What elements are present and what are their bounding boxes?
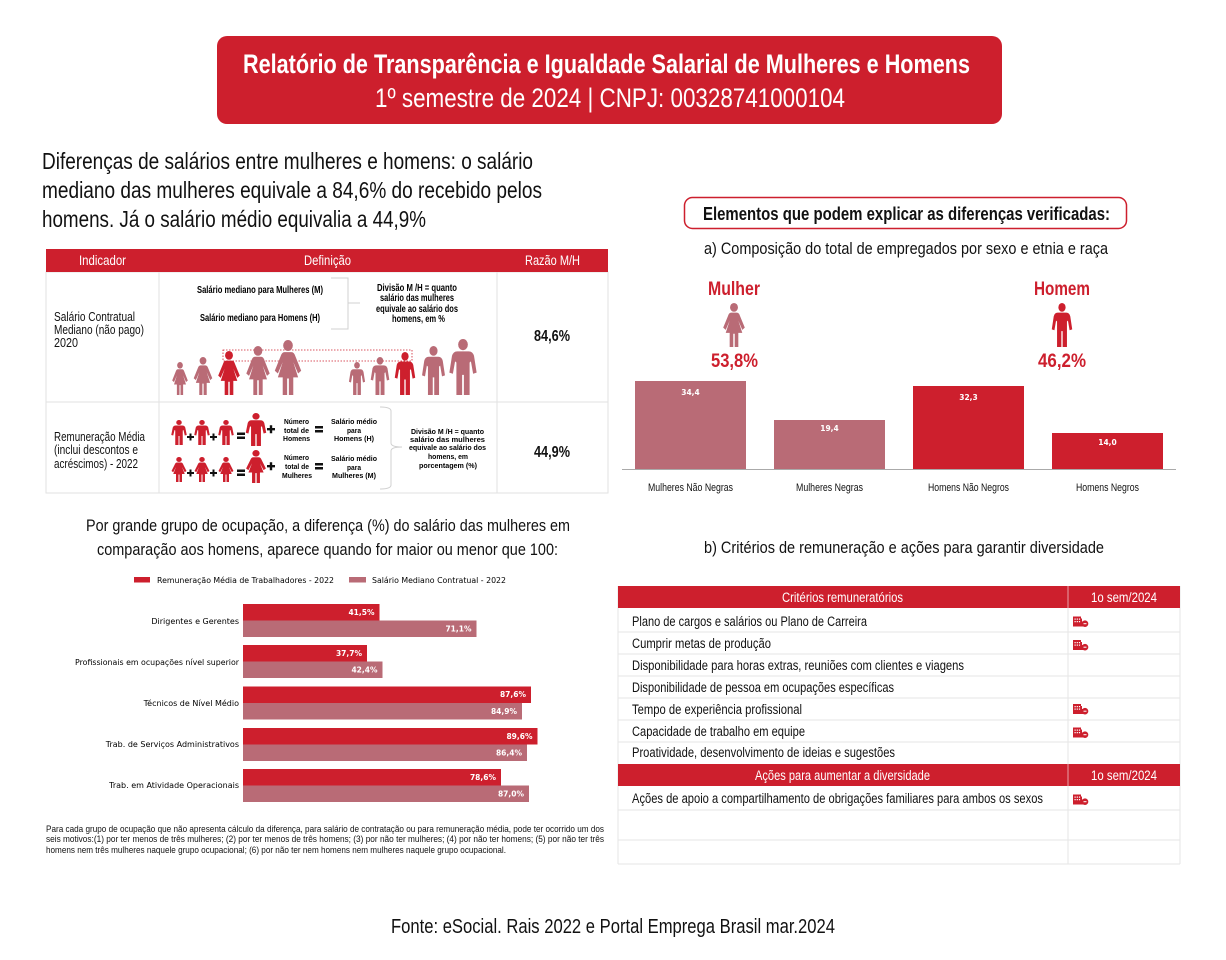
diversity row: Ações de apoio a compartilhamento de obrigações familiares para ambos os sexos — [632, 791, 1043, 806]
definition: average pay text: Divisão M /H = quanto — [411, 427, 484, 436]
bars: Serviços Administrativos: 89,6% — [506, 732, 533, 741]
table header: Indicador — [79, 253, 126, 268]
chart: composition by sex and race — [622, 381, 1176, 494]
bars: Atividade Operacionais: Trab. em Atividade Operacionais — [108, 781, 239, 790]
definition: median salary text: Salário mediano para Mulheres (M) — [197, 285, 323, 296]
heading: salary differences: homens. Já o salário médio equivalia a 44,9% — [42, 206, 426, 232]
criteria header: 1o sem/2024 — [1091, 590, 1157, 605]
definition: average pay text: Mulheres — [282, 471, 312, 480]
heading: explanatory elements — [684, 198, 1126, 228]
criteria list: Capacidade de trabalho em equipe — [632, 724, 805, 739]
bars: Técnicos: 87,6% — [500, 690, 526, 699]
heading: occupation groups: Por grande grupo de ocupação, a diferença (%) do salário das mulheres em — [86, 516, 570, 535]
bar: Mulheres Negras: Mulheres Negras — [796, 482, 863, 494]
bars: Serviços Administrativos: Trab. de Serviços Administrativos — [105, 740, 239, 749]
icons: company marks — [1073, 616, 1088, 805]
row label: average pay — [54, 429, 146, 471]
chart legend: Remuneração Média de Trabalhadores - 2022 — [157, 575, 334, 585]
bar: Homens Não Negros: 32,3 — [959, 393, 978, 402]
table header: Definição — [304, 253, 351, 268]
bars: Serviços Administrativos: 86,4% — [496, 748, 522, 758]
criteria header — [618, 586, 1180, 608]
chart: occupation bars — [75, 575, 538, 802]
diversity header: Ações para aumentar a diversidade — [755, 768, 930, 783]
definition: median salary text — [197, 278, 458, 329]
bars: Profissionais: 42,4% — [351, 666, 378, 674]
bar: Mulheres Não Negras — [635, 381, 746, 494]
bars: Dirigentes e Gerentes: 71,1% — [445, 624, 472, 634]
stat: Homem — [1034, 279, 1090, 372]
title banner — [217, 36, 1002, 124]
bar: Homens Não Negros — [913, 386, 1024, 494]
bar: Mulheres Negras: 19,4 — [820, 424, 839, 433]
heading: salary differences: mediano das mulheres equivale a 84,6% do recebido pelos — [42, 177, 542, 203]
definition: average pay text: para — [347, 463, 362, 472]
title banner: Relatório de Transparência e Igualdade Salarial de Mulheres e Homens — [243, 49, 970, 79]
definition: average pay text: Homens — [283, 434, 310, 443]
bar: Mulheres Negras — [774, 420, 885, 494]
row label: median salary — [54, 309, 144, 350]
bars: Serviços Administrativos — [105, 728, 538, 761]
definition: median salary text: salário das mulheres — [380, 292, 454, 304]
bars: Técnicos — [143, 686, 531, 720]
definition: average pay text: salário das mulheres — [410, 435, 485, 444]
bars: Técnicos: Técnicos de Nível Médio — [143, 698, 239, 708]
heading: explanatory elements: Elementos que podem explicar as diferenças verificadas: — [703, 204, 1110, 224]
table header — [46, 249, 608, 272]
title banner: 1º semestre de 2024 | CNPJ: 00328741000104 — [375, 83, 845, 113]
heading: occupation groups: comparação aos homens, aparece quando for maior ou menor que 100: — [97, 540, 558, 559]
heading: occupation groups — [86, 516, 570, 559]
chart legend — [134, 575, 506, 585]
criteria list: Disponibilidade para horas extras, reuniões com clientes e viagens — [632, 658, 964, 673]
heading: salary differences — [42, 148, 542, 232]
bars: Atividade Operacionais: 78,6% — [470, 773, 496, 782]
footnote: seis motivos:(1) por ter menos de três mulheres; (2) por ter menos de três homens; (3) por não ter mulheres; (4) por não ter homens; (5) por não ter três — [46, 834, 604, 845]
definition: average pay text: total de — [285, 462, 309, 471]
definition: median salary text: homens, em % — [392, 313, 445, 325]
row label: average pay: Remuneração Média — [54, 429, 146, 444]
definition: average pay text: Homens (H) — [334, 434, 374, 443]
footnote — [46, 824, 604, 856]
source: Fonte: eSocial. Rais 2022 e Portal Emprega Brasil mar.2024 — [391, 916, 835, 938]
definition: average pay text — [282, 407, 486, 489]
definition: average pay text: total de — [284, 426, 309, 435]
definition: average pay text: equivale ao salário dos — [409, 443, 486, 452]
bars: Dirigentes e Gerentes — [151, 604, 476, 637]
value: 84,6%: 84,6% — [534, 328, 570, 345]
bars: Profissionais: 37,7% — [336, 649, 362, 658]
stat: Mulher — [708, 279, 761, 372]
criteria header: Critérios remuneratórios — [782, 590, 903, 605]
bars: Atividade Operacionais: 87,0% — [498, 790, 524, 798]
bars: Dirigentes e Gerentes: 41,5% — [348, 608, 375, 617]
subheading a: a) Composição do total de empregados por sexo e etnia e raça — [704, 239, 1108, 258]
criteria list: Plano de cargos e salários ou Plano de Carreira — [632, 614, 867, 629]
bar: Homens Não Negros: Homens Não Negros — [928, 482, 1009, 494]
stat: Mulher: Mulher — [708, 279, 761, 300]
footnote: Para cada grupo de ocupação que não apresenta cálculo da diferença, para salário de contratação ou para remuneração média, pode ter ocorrido um dos — [46, 824, 604, 835]
panel: criteria table — [618, 586, 1180, 864]
diversity header — [618, 764, 1180, 786]
bars: Dirigentes e Gerentes: Dirigentes e Gerentes — [151, 617, 239, 626]
icons: plus and equals operators — [187, 425, 323, 476]
icons: average formula for men and women — [171, 413, 266, 483]
criteria list — [632, 614, 964, 760]
stat: Homem: Homem — [1034, 279, 1090, 300]
bar: Homens Negros — [1052, 433, 1163, 494]
stat: Mulher: 53,8% — [711, 350, 758, 372]
definition: average pay text: Salário médio — [331, 417, 377, 426]
definition: average pay text: para — [347, 426, 362, 435]
bars: Profissionais: Profissionais em ocupações nível superior — [75, 658, 240, 667]
subheading b: b) Critérios de remuneração e ações para garantir diversidade — [704, 538, 1104, 557]
row label: median salary: 2020 — [54, 335, 78, 350]
value: 44,9%: 44,9% — [534, 444, 570, 461]
bar: Homens Negros: Homens Negros — [1076, 482, 1139, 494]
definition: average pay text: Salário médio — [331, 454, 377, 463]
criteria list: Tempo de experiência profissional — [632, 702, 802, 717]
row label: median salary: Mediano (não pago) — [54, 322, 144, 337]
definition: average pay text: Número — [284, 453, 309, 462]
definition: average pay text: homens, em — [428, 452, 468, 461]
row label: average pay: acréscimos) - 2022 — [54, 456, 138, 471]
table header: Razão M/H — [525, 253, 580, 268]
criteria list: Proatividade, desenvolvimento de ideias e sugestões — [632, 745, 895, 760]
bar: Mulheres Não Negras: 34,4 — [681, 388, 700, 397]
icons: women and men ordered by salary — [172, 339, 477, 395]
bars: Atividade Operacionais — [108, 769, 529, 802]
definition: average pay text: Mulheres (M) — [332, 471, 376, 480]
definition: average pay text: porcentagem (%) — [419, 461, 477, 470]
criteria list: Disponibilidade de pessoa em ocupações específicas — [632, 680, 894, 695]
chart legend: Salário Mediano Contratual - 2022 — [372, 576, 506, 585]
row label: median salary: Salário Contratual — [54, 309, 135, 324]
row label: average pay: (inclui descontos e — [54, 442, 138, 457]
definition: median salary text: Salário mediano para Homens (H) — [200, 313, 320, 324]
footnote: homens nem três mulheres naquele grupo ocupacional; (6) por não ter nem homens nem mulheres naquele grupo ocupacional. — [46, 845, 506, 856]
diversity header: 1o sem/2024 — [1091, 768, 1157, 783]
bar: Mulheres Não Negras: Mulheres Não Negras — [648, 482, 733, 494]
bar: Homens Negros: 14,0 — [1098, 438, 1117, 447]
definition: average pay text: Número — [284, 417, 309, 426]
definition: median salary text: Divisão M /H = quanto — [377, 282, 457, 294]
bars: Técnicos: 84,9% — [491, 707, 517, 716]
definition: median salary text: equivale ao salário dos — [376, 303, 458, 315]
panel: indicator table — [46, 249, 608, 493]
heading: salary differences: Diferenças de salários entre mulheres e homens: o salário — [42, 148, 533, 174]
stat: Homem: 46,2% — [1038, 350, 1086, 372]
criteria list: Cumprir metas de produção — [632, 636, 771, 651]
bars: Profissionais — [75, 645, 382, 678]
